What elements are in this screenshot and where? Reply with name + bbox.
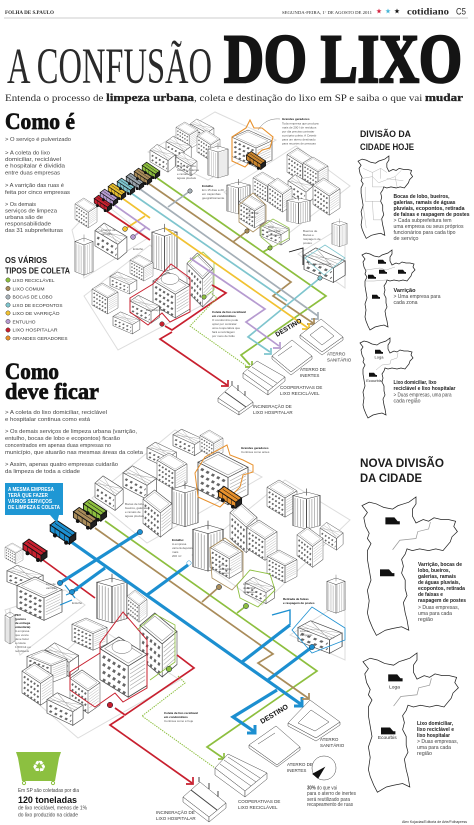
text: new cleaning regions: lobo, bueiros,	[418, 568, 451, 574]
annotations: current: para um aterro destinado	[282, 138, 316, 142]
map: new cleaning regions	[362, 497, 457, 635]
newspaper header: SEGUNDA-FEIRA, 1º DE AGOSTO DE 2011	[282, 11, 372, 16]
annotations: future: A empresa	[172, 542, 187, 546]
text block: como é: entre duas empresas	[5, 170, 60, 176]
legend	[6, 277, 68, 342]
destination labels: current: DESTINO	[274, 318, 303, 339]
annotations: current: Entulho	[202, 184, 213, 188]
annotations: current: Lixeiras de	[101, 228, 116, 232]
newspaper header	[4, 6, 468, 18]
heading: tipos de coleta: TIPOS DE COLETA	[5, 266, 70, 276]
text: bocas de lobo: funcionários para cada tipo	[394, 230, 456, 236]
text: varrição: cada zona	[394, 300, 418, 306]
annotations: current: Bocas e	[303, 233, 314, 237]
annotations: future: reciclável	[243, 590, 256, 594]
text: new household regions: > Duas empresas,	[417, 739, 458, 745]
destination labels: future: ATERRO DE	[287, 762, 313, 767]
destination labels: future: DESTINO	[259, 703, 290, 726]
annotations: current: raspagem de	[303, 237, 321, 241]
destination labels: current: INCINERAÇÃO DE	[253, 403, 292, 409]
annotations: future: 1.500 kit ou	[15, 645, 31, 649]
text: lixo domiciliar today: reciclável e lixo hospitalar	[394, 386, 456, 392]
text: new cleaning regions: uma para cada	[418, 611, 452, 617]
future arrowheads	[186, 693, 309, 784]
annotations: current: em condomínios	[212, 314, 236, 318]
destination labels: future	[156, 703, 345, 821]
destination labels: current: COOPERATIVAS DE	[280, 385, 322, 390]
callout: same company: DE LIMPEZA E COLETA	[8, 505, 60, 511]
annotations: future: varrerá depósito	[172, 546, 194, 550]
text: new household regions	[417, 721, 458, 757]
text block: como é: > A coleta do lixo	[5, 150, 50, 156]
annotations: future: a coleta	[15, 641, 26, 645]
destination labels: future: LIXO RECICLÁVEL	[238, 804, 278, 810]
text: inertes percentage: para o aterro de inertes	[307, 791, 356, 797]
annotations: future: Coleta de lixo reciclável	[164, 711, 198, 715]
text: new household regions: lixo reciclável e	[417, 727, 454, 733]
annotations: current: Grandes geradores	[282, 117, 310, 121]
future nodes	[57, 529, 315, 708]
destination labels: current: ATERRO DE	[300, 367, 326, 372]
brown route: future	[95, 528, 308, 698]
heading: como deve ficar	[5, 359, 99, 404]
annotations: current: por meio de lixão	[212, 334, 235, 338]
heading: nova divisão	[360, 457, 444, 485]
newspaper header: FOLHA DE S.PAULO	[5, 10, 55, 16]
text block: como é: > A varrição das ruas é	[5, 183, 64, 189]
annotations: future: PEV	[15, 613, 21, 617]
diagram: current city blocks	[72, 112, 350, 350]
blue unified route	[60, 532, 312, 732]
annotations: current	[101, 117, 331, 338]
text: new household regions: lixo hospitalar	[417, 733, 450, 739]
annotations: current: Lixo hospitalar	[146, 308, 165, 312]
annotations: future: Lixo	[219, 563, 225, 567]
destination labels: future: LIXO HOSPITALAR	[156, 816, 196, 821]
destinations: future	[183, 700, 340, 822]
annotations: current: reciclável	[268, 233, 281, 237]
annotations: future: Lixo de	[300, 629, 310, 633]
green recycling route: future	[105, 521, 317, 758]
annotations: future: e raspagem de postes	[283, 601, 315, 605]
text: bocas de lobo: de serviço	[394, 236, 419, 242]
text: 120 toneladas: de lixo reciclável, menos de 1%	[18, 806, 87, 812]
annotations: future: que vence	[15, 633, 29, 637]
destinations: current	[218, 319, 343, 415]
text: bocas de lobo: Bocas de lobo, bueiros,	[394, 194, 450, 200]
annotations: current: domiciliar	[246, 211, 259, 215]
text block: como deve ficar: da limpeza de toda a cidade	[5, 469, 80, 475]
domestic waste outlines	[239, 193, 266, 232]
text: inertes percentage: 30% do que vai	[307, 786, 337, 792]
map: new household regions: Loga	[389, 685, 400, 691]
text: bocas de lobo: pluviais, ecopontos, retirada	[394, 206, 465, 212]
newspaper header: C5	[456, 6, 466, 16]
text: new cleaning regions: raspagem de postes	[418, 598, 466, 604]
annotations: current: postes	[303, 241, 312, 245]
callout: same company: VÁRIOS SERVIÇOS	[8, 498, 53, 505]
orange collection truck	[246, 151, 266, 170]
text: inertes percentage: recapeamento de ruas	[307, 802, 353, 808]
destination labels: future: INCINERAÇÃO DE	[156, 809, 195, 815]
text: 120 toneladas	[18, 788, 87, 818]
map: lixo domiciliar today	[360, 338, 413, 418]
text: varrição: > Uma empresa para	[394, 294, 441, 300]
map: new household regions: Ecourbis	[378, 735, 397, 741]
annotations: future: domiciliar	[243, 586, 256, 590]
icon: recycling bin: ♻	[32, 757, 46, 776]
credit: Alex Kojacias/Editoria de Arte/Folhapress	[402, 820, 467, 824]
map: varrição zones	[362, 250, 415, 330]
route nodes: current	[123, 189, 322, 326]
text block: como é: feita por cinco empresas	[5, 190, 70, 196]
annotations: current: varrição	[101, 232, 112, 236]
hospital outline	[130, 264, 190, 325]
text: lixo domiciliar today: Lixo domiciliar, lixo	[394, 380, 436, 386]
trucks: current	[94, 162, 160, 212]
teal ecoponto route	[131, 193, 320, 352]
future routes	[43, 521, 317, 783]
text block: como é: e hospitalar é dividida	[5, 164, 65, 170]
callout: same company: A MESMA EMPRESA	[8, 487, 54, 493]
text: new cleaning regions: Varrição, bocas de	[418, 562, 462, 568]
annotations: future: Bocas de lobo,	[125, 502, 145, 506]
heading: divisão da cidade hoje: CIDADE HOJE	[360, 142, 414, 153]
heading: como deve ficar: Como	[5, 359, 59, 384]
text block: como é: serviços de limpeza	[5, 209, 57, 215]
annotations: future: recicláveis	[15, 649, 30, 653]
destination labels: current: INERTES	[300, 373, 319, 378]
annotations: future	[15, 446, 315, 723]
annotations: future: Grandes geradores	[241, 446, 269, 450]
annotations: current: a própria coleta. A Cetesb	[282, 134, 317, 138]
annotations: current: Lixo	[246, 207, 252, 211]
title: A CONFUSÃO	[7, 39, 212, 95]
text: new household regions: região	[417, 751, 432, 757]
annotations: current: Coleta de lixo reciclável	[212, 310, 246, 314]
legend: LIXO COMUM	[12, 286, 44, 292]
text: lixo domiciliar today: > Duas empresas, uma para	[394, 392, 452, 398]
text block: como é: responsabilidade	[5, 222, 51, 228]
gray storm drain route	[140, 189, 318, 316]
destination labels: future: SANITÁRIO	[320, 742, 345, 748]
text: new cleaning regions: de faixas e	[418, 592, 443, 598]
heading: nova divisão: DA CIDADE	[360, 473, 422, 485]
text: varrição	[394, 288, 441, 306]
destination labels: future: INERTES	[287, 768, 306, 773]
annotations: current: para recortes de pessoas	[282, 142, 316, 146]
text block: como é: domiciliar, reciclável	[5, 157, 61, 163]
destination labels: current: LIXO RECICLÁVEL	[280, 390, 320, 396]
text: 120 toneladas: Em SP são coletadas por dia	[18, 788, 79, 794]
text: new cleaning regions: de águas pluviais,	[418, 580, 461, 586]
heading: como deve ficar: deve ficar	[5, 379, 99, 404]
annotations: future: domiciliar	[219, 567, 232, 571]
text block: como deve ficar: município, que atuarão nas mesmas áreas da coleta	[5, 450, 143, 456]
text: new cleaning regions: > Duas empresas,	[418, 605, 459, 611]
annotations: current: em caçambas	[202, 192, 221, 196]
destination labels: current: LIXO HOSPITALAR	[253, 410, 293, 415]
legend: LIXO DE VARRIÇÃO	[12, 310, 60, 317]
annotations: future: Retirada de faixas	[283, 597, 309, 601]
annotations: current: por dia precisa contratar	[282, 130, 314, 134]
annotations: future: Continua como antes	[241, 450, 270, 454]
legend: ENTULHO	[12, 319, 36, 325]
brown common waste route	[148, 183, 313, 323]
annotations: future: Entulho:	[172, 538, 184, 542]
red hospital waste route	[105, 210, 227, 385]
annotations: current: Lixo	[268, 225, 274, 229]
annotations: future: voluntária)	[15, 625, 30, 629]
helipad: future	[112, 640, 132, 654]
heading: tipos de coleta: OS VÁRIOS	[5, 254, 47, 265]
text: 120 toneladas: do lixo produzido na cidade	[18, 812, 78, 818]
annotations: current: mais de 200 l de resíduos	[282, 126, 317, 130]
heading: divisão da cidade hoje: DIVISÃO DA	[360, 129, 411, 140]
pie chart: 30%	[312, 756, 336, 780]
text: bocas de lobo: > Cada subprefeitura tem	[394, 218, 452, 224]
annotations: future: 200 m³	[172, 554, 181, 558]
annotations: future: Entulho	[72, 601, 83, 605]
destination labels: future: ATERRO	[320, 737, 339, 742]
text: new household regions: Lixo domiciliar,	[417, 721, 454, 727]
annotations: future: Lixo	[243, 582, 249, 586]
annotations: future: águas pluviais	[125, 514, 145, 518]
future outlines	[70, 445, 345, 707]
text block: como deve ficar: concentrados em apenas duas empresas no	[5, 443, 111, 449]
annotations: current: fará a reciclagem	[212, 330, 236, 334]
annotations: future: Lixo de	[46, 582, 56, 586]
annotations: future: varrição	[46, 586, 57, 590]
text block: como é: urbana são de	[5, 215, 43, 221]
annotations: current: comum	[246, 215, 256, 219]
annotations: future: em condomínios	[164, 715, 188, 719]
annotations: current: domiciliar	[268, 229, 281, 233]
green dotted condominium route	[190, 292, 248, 367]
callout: same company: TERÁ QUE FAZER	[8, 492, 48, 499]
annotations: future: e ramais de	[125, 510, 141, 514]
annotations: future: bueiros, galerias	[125, 506, 148, 510]
annotations: current: Bueiros de	[303, 229, 318, 233]
text: lixo domiciliar today	[394, 380, 456, 404]
text: bocas de lobo: de faixas e raspagem de postes	[394, 212, 470, 218]
icon: recycling bin	[16, 752, 61, 785]
legend: BOCAS DE LOBO	[12, 295, 53, 301]
legend: GRANDES GERADORES	[12, 336, 68, 342]
text: 120 toneladas: 120 toneladas	[18, 795, 77, 805]
text: bocas de lobo: galerias, ramais de águas	[394, 200, 456, 206]
callout: same company	[5, 483, 63, 523]
heading: nova divisão: NOVA DIVISÃO	[360, 457, 444, 470]
text: bocas de lobo: uma empresa ou seus próprios	[394, 224, 464, 230]
legend: LIXO DE ECOPONTOS	[12, 303, 62, 309]
text block: como deve ficar: > Assim, apenas quatro empresas cuidarão	[5, 462, 118, 468]
text block: como é: das 31 subprefeituras	[5, 228, 63, 234]
future trucks	[23, 486, 242, 562]
annotations: current: Em 15 dias a 20	[202, 188, 224, 192]
annotations: future: Continua como é hoje	[164, 719, 194, 723]
destination labels: current: ATERRO	[327, 352, 346, 356]
green recycling route	[157, 178, 326, 365]
annotations: current: bueiros, galerias	[177, 168, 200, 172]
text block: como é: > Os demais	[5, 202, 36, 208]
collection routes: current	[105, 178, 326, 385]
annotations: current: e ramais de	[177, 172, 193, 176]
annotations: future: deve fazer	[15, 637, 29, 641]
annotations: future: mais	[172, 550, 179, 554]
legend: LIXO RECICLÁVEL	[12, 277, 55, 284]
text block: como deve ficar: e hospitalar continua como está	[5, 417, 90, 423]
text block: como deve ficar: entulho, bocas de lobo e ecopontos) ficarão	[5, 436, 120, 442]
text block: como deve ficar	[5, 410, 143, 475]
map: new household regions	[363, 653, 458, 792]
annotations: future: (pontos	[15, 617, 26, 621]
text: new cleaning regions	[418, 562, 466, 623]
newspaper header: cotidiano	[407, 6, 449, 18]
text: new cleaning regions: galerias, ramais	[418, 574, 456, 580]
subtitle: Entenda o processo de limpeza urbana , coleta e destinação do lixo em SP e saiba o que vai mudar	[5, 92, 463, 104]
text block: como é: > O serviço é pulverizado	[5, 137, 71, 143]
text block: como é	[5, 137, 71, 234]
green dotted route: future	[142, 676, 215, 768]
text: lixo domiciliar today: cada região	[394, 398, 421, 404]
map: lixo domiciliar today: Loga	[375, 354, 384, 360]
annotations: future: de entrega	[15, 621, 31, 625]
helipad: current	[161, 274, 179, 284]
text block: como deve ficar: > A coleta do lixo domiciliar, reciclável	[5, 410, 107, 416]
heading: como é: Como é	[5, 109, 75, 134]
heading: divisão da cidade hoje	[360, 129, 414, 153]
destination labels: current	[253, 318, 352, 415]
red route: future	[43, 560, 194, 783]
annotations: future: A empresa	[15, 629, 30, 633]
text: new cleaning regions: ecopontos, retirada	[418, 586, 465, 592]
text: inertes percentage	[307, 786, 356, 808]
heading: tipos de coleta	[5, 254, 70, 276]
annotations: current: uma cooperativa que	[212, 326, 240, 330]
purple debris route	[113, 204, 279, 346]
annotations: current: águas pluviais	[177, 176, 197, 180]
destination labels: current: SANITÁRIO	[327, 356, 352, 362]
legend: LIXO HOSPITALAR	[12, 328, 58, 334]
text: new cleaning regions: região	[418, 617, 433, 623]
map: lixo domiciliar today: Ecourbis	[366, 378, 382, 383]
annotations: current: Entulho	[133, 247, 144, 251]
annotations: current: Bocas de lobo,	[177, 164, 197, 168]
yellow sweeping route	[122, 198, 308, 328]
annotations: current: optar por contratar	[212, 322, 237, 326]
text: varrição: Varrição	[394, 288, 416, 294]
diagram: future city blocks	[5, 429, 350, 738]
annotations: future: ecoponto	[300, 633, 313, 637]
map: subprefeituras	[358, 156, 413, 238]
destination labels: future: COOPERATIVAS DE	[238, 799, 280, 804]
grandes geradores outline	[232, 120, 273, 167]
text: bocas de lobo	[394, 194, 470, 242]
annotations: current: Lixo de ecoponto	[308, 262, 331, 266]
annotations: current: geograficamente	[202, 196, 225, 200]
annotations: current: Toda empresa que produza	[282, 122, 319, 126]
title	[7, 21, 462, 97]
text: new household regions: uma para cada	[417, 745, 451, 751]
arrowheads: current	[221, 312, 318, 386]
text: inertes percentage: será reutilizado para	[307, 797, 350, 803]
annotations: future: comum	[219, 571, 229, 575]
annotations: current: O condomínio pode	[212, 318, 239, 322]
text block: como deve ficar: > Os demais serviços de limpeza urbana (varrição,	[5, 429, 137, 435]
